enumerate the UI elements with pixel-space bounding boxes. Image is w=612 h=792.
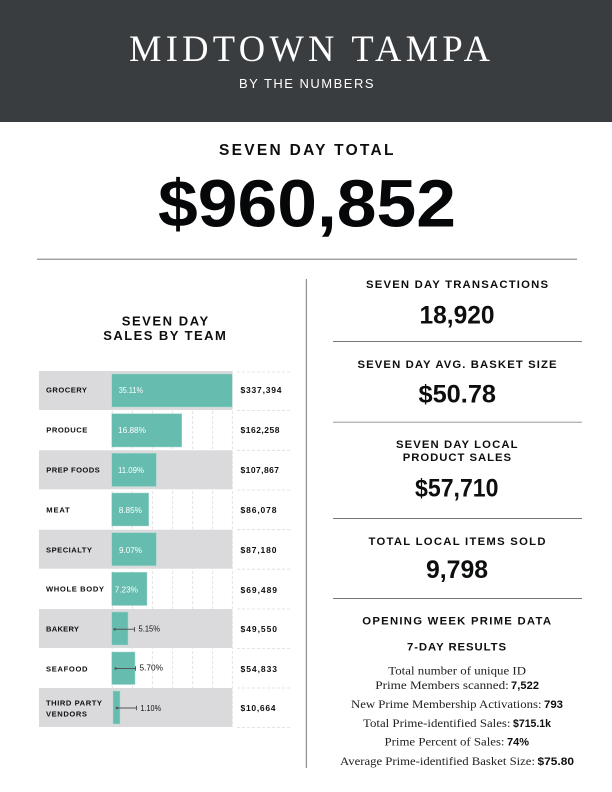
- percentages: 5.70%: [140, 663, 163, 673]
- prime: members scanned: [375, 664, 539, 692]
- percentages: 9.07%: [119, 545, 142, 555]
- stat: basket size: [358, 359, 557, 409]
- dollar values: $87,180: [240, 545, 277, 555]
- heading: sales by team: SEVEN DAY: [122, 313, 209, 328]
- prime: identified sales: $715.1k: [513, 718, 552, 730]
- dollar values: $49,550: [240, 624, 277, 634]
- heading: sales by team: SALES BY TEAM: [103, 328, 226, 343]
- subtitle: BY THE NUMBERS: [239, 76, 374, 91]
- prime: average basket: $75.80: [538, 756, 574, 768]
- team labels: SPECIALTY: [46, 546, 92, 554]
- dollar values: $107,867: [240, 465, 279, 475]
- team labels: WHOLE BODY: [46, 585, 104, 594]
- bars: [112, 374, 232, 724]
- heading: sales by team: [103, 313, 226, 343]
- prime: members scanned: Prime Members scanned:: [375, 678, 509, 692]
- prime: average basket: Average Prime-identified Basket Size:: [340, 754, 535, 768]
- team labels: SEAFOOD: [46, 665, 88, 674]
- bar chart: sales by team: [39, 371, 292, 728]
- dollar values: $337,394: [240, 385, 282, 395]
- team labels: [46, 386, 104, 719]
- dollar values: $86,078: [240, 505, 277, 515]
- stat: local items sold: [368, 536, 546, 584]
- panel: seven day total: [158, 142, 456, 242]
- percentages: 7.23%: [115, 585, 138, 595]
- prime: percent of sales: 74%: [507, 737, 529, 749]
- prime: members scanned: Total number of unique ID: [388, 664, 526, 678]
- percentages: 5.15%: [138, 624, 160, 634]
- stat: transactions: 18,920: [420, 301, 494, 329]
- dollar values: $10,664: [240, 703, 276, 713]
- prime: members scanned: 7,522: [511, 680, 539, 692]
- heading: prime data: OPENING WEEK PRIME DATA: [362, 616, 551, 628]
- team labels: BAKERY: [46, 625, 79, 634]
- percentages: 35.11%: [119, 385, 143, 395]
- dollar values: $162,258: [240, 425, 280, 435]
- title: MIDTOWN TAMPA: [129, 28, 491, 69]
- stat: local items sold: 9,798: [426, 556, 488, 584]
- prime: identified sales: Total Prime-identified Sales:: [363, 716, 510, 730]
- heading: seven day total: SEVEN DAY TOTAL: [219, 142, 394, 159]
- stat: local items sold: TOTAL LOCAL ITEMS SOLD: [368, 536, 546, 548]
- team labels: VENDORS: [46, 710, 87, 719]
- percentages: 1.10%: [140, 703, 161, 713]
- percentages: 16.88%: [118, 425, 146, 435]
- stat: local product sales: PRODUCT SALES: [403, 452, 511, 464]
- percentages: 11.09%: [118, 465, 144, 475]
- stat: transactions: [366, 279, 548, 329]
- percentages: [115, 385, 163, 713]
- panel: prime data: [340, 616, 574, 768]
- prime: activations: 793: [544, 699, 563, 711]
- panel: key stats: [333, 279, 582, 599]
- dollar values: $54,833: [240, 664, 277, 674]
- stat: local product sales: SEVEN DAY LOCAL: [396, 439, 518, 451]
- team labels: PRODUCE: [46, 426, 87, 435]
- leader lines: [113, 627, 136, 710]
- stat: local product sales: [396, 439, 518, 503]
- stat: basket size: SEVEN DAY AVG. BASKET SIZE: [358, 359, 557, 371]
- prime: activations: New Prime Membership Activations:: [351, 697, 542, 711]
- header banner: [0, 0, 612, 122]
- stat: transactions: SEVEN DAY TRANSACTIONS: [366, 279, 548, 291]
- stat: basket size: $50.78: [418, 381, 496, 409]
- percentages: 8.85%: [119, 505, 142, 515]
- stat: local product sales: $57,710: [415, 475, 498, 503]
- big number: total sales: $960,852: [158, 167, 456, 242]
- dollar values: $69,489: [240, 585, 277, 595]
- team labels: PREP FOODS: [46, 466, 100, 475]
- team labels: MEAT: [46, 506, 70, 515]
- prime: percent of sales: Prime Percent of Sales:: [384, 735, 504, 749]
- panel: sales by team: [39, 313, 292, 728]
- dollar values: [240, 385, 282, 713]
- heading: seven day results: 7-DAY RESULTS: [407, 642, 506, 654]
- team labels: GROCERY: [46, 386, 87, 395]
- team labels: THIRD PARTY: [46, 699, 102, 708]
